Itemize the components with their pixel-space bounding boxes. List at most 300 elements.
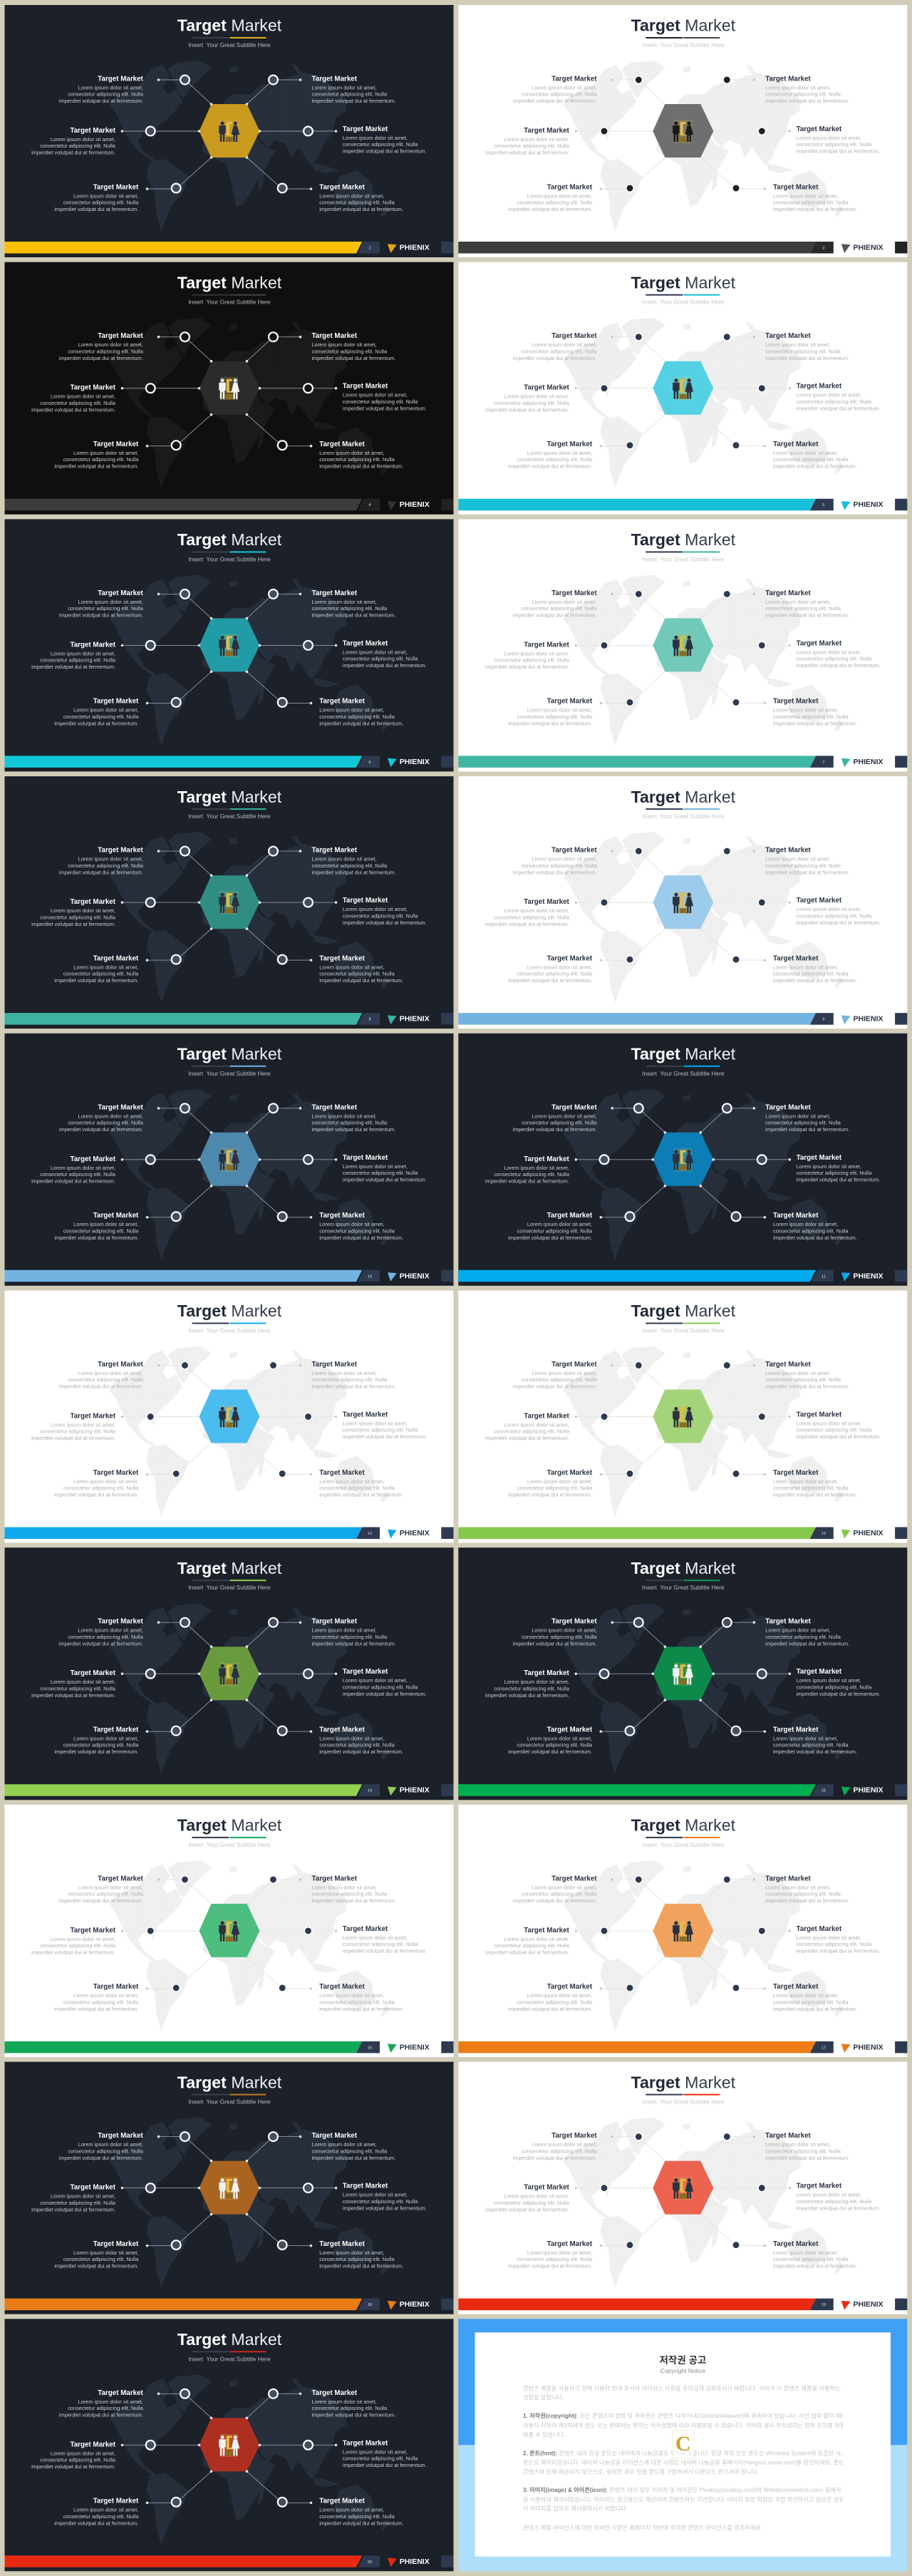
subtitle: Insert Your Great Subtitle Here xyxy=(642,41,725,48)
icon: couple xyxy=(219,2434,239,2456)
callout bottom right: Lorem ipsum dolor sit amet, xyxy=(319,2507,384,2513)
dot nodes xyxy=(601,334,765,449)
callout mid right: Lorem ipsum dolor sit amet, xyxy=(797,649,861,655)
title rule xyxy=(192,1580,266,1581)
callout top left: Target Market xyxy=(98,1875,144,1882)
title: Target Market xyxy=(177,530,282,549)
slide 20: dark, red xyxy=(4,2319,453,2571)
slide 18: dark, orange xyxy=(4,2062,453,2314)
callout top left: Lorem ipsum dolor sit amet, xyxy=(78,599,143,605)
callout top left: consectetur adipiscing elit. Nulla xyxy=(522,862,597,869)
footer bar: PHIENIX xyxy=(400,2300,430,2309)
centre hexagon xyxy=(200,1390,259,1443)
callout bottom left: consectetur adipiscing elit. Nulla xyxy=(63,199,139,205)
ring nodes xyxy=(600,1618,767,1736)
callout mid right: Target Market xyxy=(343,897,388,905)
callout bottom right: Lorem ipsum dolor sit amet, xyxy=(773,1735,838,1741)
callout top right: Target Market xyxy=(312,1103,358,1111)
callout bottom right: consectetur adipiscing elit. Nulla xyxy=(319,1485,395,1491)
world map xyxy=(563,1860,844,2031)
centre hexagon xyxy=(653,361,713,415)
world map xyxy=(563,1603,844,1774)
callout bottom left: imperdiet volutpat dui at fermentum. xyxy=(508,206,592,212)
footer bar: 12 xyxy=(368,1532,372,1536)
callout mid left: consectetur adipiscing elit. Nulla xyxy=(494,1428,570,1435)
callout bottom left: Target Market xyxy=(93,954,139,962)
callout mid right: consectetur adipiscing elit. Nulla xyxy=(797,398,872,405)
callout mid left: Lorem ipsum dolor sit amet, xyxy=(51,1936,115,1942)
callout bottom left: consectetur adipiscing elit. Nulla xyxy=(63,1485,139,1491)
callout top right: Lorem ipsum dolor sit amet, xyxy=(765,1884,830,1890)
callout bottom left: Lorem ipsum dolor sit amet, xyxy=(527,2250,592,2256)
slide 3: white, grey xyxy=(458,5,907,257)
callout mid right: imperdiet volutpat dui at fermentum. xyxy=(343,662,427,669)
connector lines xyxy=(575,850,791,962)
footer bar: 19 xyxy=(822,2303,826,2307)
callout bottom left: Target Market xyxy=(547,441,593,448)
callout top left: imperdiet volutpat dui at fermentum. xyxy=(59,1384,143,1390)
title rule xyxy=(646,2094,720,2096)
icon: couple xyxy=(673,1149,693,1171)
callout mid right: consectetur adipiscing elit. Nulla xyxy=(343,2456,418,2462)
callout bottom left: imperdiet volutpat dui at fermentum. xyxy=(54,2263,138,2270)
callout top right: imperdiet volutpat dui at fermentum. xyxy=(312,2412,395,2418)
centre hexagon xyxy=(653,104,713,158)
callout top left: Target Market xyxy=(98,1361,144,1369)
callout mid left: Target Market xyxy=(70,2184,116,2192)
callout bottom left: consectetur adipiscing elit. Nulla xyxy=(63,456,139,463)
callout mid right: Target Market xyxy=(797,1154,842,1162)
callout mid left: imperdiet volutpat dui at fermentum. xyxy=(31,1949,115,1956)
callout mid left: consectetur adipiscing elit. Nulla xyxy=(40,143,116,149)
callout bottom right: imperdiet volutpat dui at fermentum. xyxy=(319,720,403,726)
callout bottom left: Lorem ipsum dolor sit amet, xyxy=(73,2507,138,2513)
title rule xyxy=(192,37,266,38)
callout top right: Target Market xyxy=(312,847,358,855)
callout top right: Target Market xyxy=(765,1103,812,1111)
world map xyxy=(563,1089,844,1260)
callout mid right: imperdiet volutpat dui at fermentum. xyxy=(797,1433,881,1440)
centre hexagon xyxy=(653,1647,713,1700)
callout top left: Lorem ipsum dolor sit amet, xyxy=(532,2141,597,2148)
callout top right: imperdiet volutpat dui at fermentum. xyxy=(312,355,395,361)
callout top right: consectetur adipiscing elit. Nulla xyxy=(765,348,841,354)
callout mid left: Target Market xyxy=(524,2184,570,2192)
callout top left: consectetur adipiscing elit. Nulla xyxy=(522,1634,597,1640)
callout bottom left: Lorem ipsum dolor sit amet, xyxy=(73,450,138,456)
callout mid right: consectetur adipiscing elit. Nulla xyxy=(797,141,872,148)
copyright heading: 저작권 공고 xyxy=(659,2355,706,2366)
callout top left: consectetur adipiscing elit. Nulla xyxy=(522,1376,597,1383)
callout mid left: Lorem ipsum dolor sit amet, xyxy=(51,1165,115,1171)
callout top right: consectetur adipiscing elit. Nulla xyxy=(765,91,841,98)
world map xyxy=(563,575,844,746)
footer bar xyxy=(458,1784,907,1796)
callout top left: Target Market xyxy=(551,1103,597,1111)
callout top left: Lorem ipsum dolor sit amet, xyxy=(532,856,597,862)
icon: couple xyxy=(673,1406,693,1428)
footer bar xyxy=(458,1270,907,1282)
callout top left: imperdiet volutpat dui at fermentum. xyxy=(59,98,143,104)
callout bottom right: Target Market xyxy=(319,1726,365,1733)
callout mid right: Lorem ipsum dolor sit amet, xyxy=(343,649,408,655)
centre hexagon xyxy=(200,2418,259,2471)
title: Target Market xyxy=(631,530,736,549)
callout top right: consectetur adipiscing elit. Nulla xyxy=(312,1120,388,1126)
subtitle: Insert Your Great Subtitle Here xyxy=(188,2098,271,2106)
callout top right: imperdiet volutpat dui at fermentum. xyxy=(765,355,849,361)
slide 7: white, mint xyxy=(458,519,907,771)
callout mid right: Lorem ipsum dolor sit amet, xyxy=(797,2192,861,2198)
callout top right: imperdiet volutpat dui at fermentum. xyxy=(312,869,395,875)
callout top left: consectetur adipiscing elit. Nulla xyxy=(68,1634,144,1640)
callout top right: Lorem ipsum dolor sit amet, xyxy=(312,2141,377,2148)
footer bar: PHIENIX xyxy=(400,1529,430,1537)
dot nodes xyxy=(601,847,765,963)
callout bottom right: imperdiet volutpat dui at fermentum. xyxy=(773,463,857,470)
title: Target Market xyxy=(177,1816,282,1835)
callout bottom left: consectetur adipiscing elit. Nulla xyxy=(63,1999,139,2005)
slide 15: dark, green xyxy=(458,1547,907,1800)
callout top right: Lorem ipsum dolor sit amet, xyxy=(312,1370,377,1376)
callout mid left: imperdiet volutpat dui at fermentum. xyxy=(31,664,115,670)
title rule xyxy=(646,1323,720,1324)
callout top right: Lorem ipsum dolor sit amet, xyxy=(312,1884,377,1890)
footer bar xyxy=(4,2299,453,2310)
centre hexagon xyxy=(200,618,259,671)
callout bottom left: Target Market xyxy=(93,1469,139,1477)
slide 2: dark, yellow xyxy=(4,5,453,257)
copyright body text: 따를 수 있습니다. xyxy=(523,2431,566,2438)
connector lines xyxy=(575,336,791,447)
title rule xyxy=(192,551,266,552)
connector lines xyxy=(121,1621,337,1733)
callout mid right: Target Market xyxy=(797,897,842,905)
callout top left: imperdiet volutpat dui at fermentum. xyxy=(513,1897,597,1904)
callout bottom right: consectetur adipiscing elit. Nulla xyxy=(319,2256,395,2262)
callout top right: Lorem ipsum dolor sit amet, xyxy=(312,856,377,862)
callout mid left: consectetur adipiscing elit. Nulla xyxy=(40,914,116,920)
hexagon vertex dots xyxy=(198,2160,261,2215)
callout mid left: consectetur adipiscing elit. Nulla xyxy=(40,1685,116,1691)
callout bottom left: Lorem ipsum dolor sit amet, xyxy=(73,192,138,199)
callout top right: consectetur adipiscing elit. Nulla xyxy=(312,348,388,354)
centre hexagon xyxy=(200,1647,259,1700)
hexagon vertex dots xyxy=(651,1131,715,1187)
copyright body text: 2. 폰트(font): 콘텐츠 내의 한글 폰트는 네이버의 나눔글꼴로 제작되었습니다. 한글 외의 모든 폰트는 Windows System에 포함된 시스템 xyxy=(523,2449,851,2456)
callout bottom left: imperdiet volutpat dui at fermentum. xyxy=(54,206,138,212)
footer bar: PHIENIX xyxy=(400,500,430,509)
title: Target Market xyxy=(177,2330,282,2349)
callout bottom right: imperdiet volutpat dui at fermentum. xyxy=(319,1748,403,1755)
title rule xyxy=(192,1066,266,1067)
callout top left: imperdiet volutpat dui at fermentum. xyxy=(59,1897,143,1904)
subtitle: Insert Your Great Subtitle Here xyxy=(188,1841,271,1848)
callout top right: Target Market xyxy=(765,2132,812,2140)
callout top right: Target Market xyxy=(312,589,358,597)
callout mid right: consectetur adipiscing elit. Nulla xyxy=(797,1170,872,1176)
icon: couple xyxy=(219,892,239,914)
callout bottom right: Target Market xyxy=(319,954,365,962)
footer bar xyxy=(4,1013,453,1025)
footer bar xyxy=(458,1013,907,1025)
title rule xyxy=(646,1066,720,1067)
callout bottom left: Lorem ipsum dolor sit amet, xyxy=(73,1735,138,1741)
subtitle: Insert Your Great Subtitle Here xyxy=(188,41,271,48)
world map xyxy=(110,1860,390,2031)
callout bottom left: consectetur adipiscing elit. Nulla xyxy=(517,199,593,205)
callout bottom left: imperdiet volutpat dui at fermentum. xyxy=(508,1491,592,1498)
callout bottom left: Lorem ipsum dolor sit amet, xyxy=(527,450,592,456)
callout bottom right: imperdiet volutpat dui at fermentum. xyxy=(773,720,857,726)
callout mid left: Lorem ipsum dolor sit amet, xyxy=(51,393,115,400)
copyright body text: 것임을 알립니다. xyxy=(523,2394,564,2401)
callout top left: imperdiet volutpat dui at fermentum. xyxy=(513,1384,597,1390)
callout bottom right: consectetur adipiscing elit. Nulla xyxy=(773,1999,849,2005)
centre hexagon xyxy=(653,2161,713,2215)
callout top right: consectetur adipiscing elit. Nulla xyxy=(312,91,388,98)
callout mid right: Lorem ipsum dolor sit amet, xyxy=(797,1934,861,1941)
callout top left: Lorem ipsum dolor sit amet, xyxy=(532,84,597,91)
callout bottom right: imperdiet volutpat dui at fermentum. xyxy=(319,206,403,212)
connector lines xyxy=(575,78,791,190)
callout bottom right: Target Market xyxy=(319,183,365,191)
callout top right: imperdiet volutpat dui at fermentum. xyxy=(765,869,849,875)
callout top left: Lorem ipsum dolor sit amet, xyxy=(78,1884,143,1890)
callout bottom right: Target Market xyxy=(319,2240,365,2248)
callout bottom right: Target Market xyxy=(319,1212,365,1220)
footer bar: 14 xyxy=(368,1789,372,1793)
title: Target Market xyxy=(177,1045,282,1063)
callout bottom left: Target Market xyxy=(547,1469,593,1477)
callout top left: imperdiet volutpat dui at fermentum. xyxy=(513,355,597,361)
slide 4: black, grey xyxy=(4,262,453,515)
callout top right: imperdiet volutpat dui at fermentum. xyxy=(312,1384,395,1390)
callout mid right: Target Market xyxy=(343,1154,388,1162)
icon: couple xyxy=(673,120,693,143)
icon: couple xyxy=(673,634,693,656)
callout bottom left: Target Market xyxy=(93,2240,139,2248)
hexagon vertex dots xyxy=(198,2416,261,2473)
callout bottom right: Lorem ipsum dolor sit amet, xyxy=(773,1992,838,1999)
slide 13: white, lime xyxy=(458,1290,907,1542)
callout mid right: Target Market xyxy=(343,125,388,133)
copyright subheading: Copyright Notice xyxy=(660,2367,705,2374)
icon: couple xyxy=(219,1663,239,1685)
callout bottom left: consectetur adipiscing elit. Nulla xyxy=(63,2513,139,2520)
dot nodes xyxy=(601,590,765,706)
callout bottom left: Lorem ipsum dolor sit amet, xyxy=(527,1478,592,1485)
callout mid right: imperdiet volutpat dui at fermentum. xyxy=(797,2205,881,2211)
connector lines xyxy=(575,2135,791,2247)
callout mid left: imperdiet volutpat dui at fermentum. xyxy=(31,150,115,156)
connector lines xyxy=(121,1878,337,1990)
watermark C: C xyxy=(675,2432,691,2456)
connector lines xyxy=(121,2392,337,2504)
callout bottom left: consectetur adipiscing elit. Nulla xyxy=(63,971,139,977)
callout mid right: Lorem ipsum dolor sit amet, xyxy=(343,392,408,398)
callout bottom right: Lorem ipsum dolor sit amet, xyxy=(319,1221,384,1227)
callout bottom left: Target Market xyxy=(547,183,593,191)
callout top left: imperdiet volutpat dui at fermentum. xyxy=(513,98,597,104)
callout top right: imperdiet volutpat dui at fermentum. xyxy=(312,1126,395,1133)
connector lines xyxy=(121,1364,337,1475)
callout mid right: Target Market xyxy=(343,1925,388,1933)
world map xyxy=(110,61,390,232)
slide 6: dark, cyan xyxy=(4,519,453,771)
callout mid left: Target Market xyxy=(524,1669,570,1677)
slide 12: white, blue xyxy=(4,1290,453,1542)
callout mid right: consectetur adipiscing elit. Nulla xyxy=(343,398,418,405)
callout bottom left: imperdiet volutpat dui at fermentum. xyxy=(54,2006,138,2012)
callout top right: consectetur adipiscing elit. Nulla xyxy=(765,1634,841,1640)
callout top right: imperdiet volutpat dui at fermentum. xyxy=(312,2155,395,2161)
callout bottom left: consectetur adipiscing elit. Nulla xyxy=(517,1742,593,1748)
callout top left: Target Market xyxy=(551,1618,597,1626)
ring nodes xyxy=(146,1618,313,1736)
callout top right: imperdiet volutpat dui at fermentum. xyxy=(765,1126,849,1133)
callout top left: Target Market xyxy=(551,1361,597,1369)
callout mid left: Lorem ipsum dolor sit amet, xyxy=(51,2450,115,2456)
title rule xyxy=(192,808,266,810)
callout top right: imperdiet volutpat dui at fermentum. xyxy=(312,98,395,104)
callout mid left: consectetur adipiscing elit. Nulla xyxy=(40,1171,116,1178)
callout top left: Target Market xyxy=(551,2132,597,2140)
callout bottom left: imperdiet volutpat dui at fermentum. xyxy=(508,1235,592,1241)
connector lines xyxy=(121,593,337,704)
slide 5: white, cyan xyxy=(458,262,907,515)
callout mid right: Target Market xyxy=(797,1668,842,1676)
callout bottom right: consectetur adipiscing elit. Nulla xyxy=(773,1485,849,1491)
callout top left: consectetur adipiscing elit. Nulla xyxy=(522,605,597,612)
hexagon vertex dots xyxy=(651,1645,715,1701)
callout top right: Lorem ipsum dolor sit amet, xyxy=(312,341,377,348)
title: Target Market xyxy=(177,2073,282,2091)
callout top right: imperdiet volutpat dui at fermentum. xyxy=(765,612,849,619)
callout top right: imperdiet volutpat dui at fermentum. xyxy=(765,2155,849,2161)
callout bottom right: imperdiet volutpat dui at fermentum. xyxy=(319,2006,403,2012)
subtitle: Insert Your Great Subtitle Here xyxy=(188,1327,271,1334)
callout mid right: consectetur adipiscing elit. Nulla xyxy=(343,1684,418,1690)
footer bar: 18 xyxy=(368,2303,372,2307)
callout mid right: Target Market xyxy=(343,1411,388,1418)
callout top right: imperdiet volutpat dui at fermentum. xyxy=(765,98,849,104)
callout bottom right: Target Market xyxy=(773,1469,819,1477)
callout bottom right: consectetur adipiscing elit. Nulla xyxy=(773,713,849,720)
icon: couple xyxy=(673,2178,693,2200)
callout mid left: Lorem ipsum dolor sit amet, xyxy=(504,1679,569,1685)
callout bottom left: consectetur adipiscing elit. Nulla xyxy=(63,2256,139,2262)
callout bottom right: Target Market xyxy=(773,441,819,448)
callout bottom left: imperdiet volutpat dui at fermentum. xyxy=(54,720,138,726)
callout top right: consectetur adipiscing elit. Nulla xyxy=(312,2405,388,2411)
subtitle: Insert Your Great Subtitle Here xyxy=(642,1584,725,1591)
callout bottom right: Lorem ipsum dolor sit amet, xyxy=(773,2250,838,2256)
callout top left: Lorem ipsum dolor sit amet, xyxy=(532,1627,597,1634)
centre hexagon xyxy=(653,1390,713,1443)
callout bottom left: consectetur adipiscing elit. Nulla xyxy=(517,1485,593,1491)
connector lines xyxy=(121,850,337,962)
footer bar: 9 xyxy=(822,1018,824,1022)
callout mid right: imperdiet volutpat dui at fermentum. xyxy=(343,2462,427,2468)
callout bottom right: consectetur adipiscing elit. Nulla xyxy=(319,1742,395,1748)
callout top right: Target Market xyxy=(312,2389,358,2397)
callout bottom left: Lorem ipsum dolor sit amet, xyxy=(73,1478,138,1485)
callout bottom left: Lorem ipsum dolor sit amet, xyxy=(527,1992,592,1999)
world map xyxy=(563,318,844,489)
centre hexagon xyxy=(653,875,713,929)
callout top left: consectetur adipiscing elit. Nulla xyxy=(522,2148,597,2154)
callout top left: Lorem ipsum dolor sit amet, xyxy=(78,2141,143,2148)
callout top right: imperdiet volutpat dui at fermentum. xyxy=(765,1640,849,1647)
dot nodes xyxy=(147,1876,312,1992)
callout mid right: Lorem ipsum dolor sit amet, xyxy=(343,1934,408,1941)
callout bottom left: imperdiet volutpat dui at fermentum. xyxy=(54,2520,138,2526)
callout mid right: consectetur adipiscing elit. Nulla xyxy=(797,1684,872,1690)
footer bar: PHIENIX xyxy=(854,1529,884,1537)
callout mid left: Lorem ipsum dolor sit amet, xyxy=(504,1421,569,1428)
slide 17: white, orange xyxy=(458,1805,907,2057)
ring nodes xyxy=(146,2389,313,2507)
callout bottom right: imperdiet volutpat dui at fermentum. xyxy=(773,2263,857,2270)
centre hexagon xyxy=(200,1904,259,1957)
callout bottom left: consectetur adipiscing elit. Nulla xyxy=(517,1227,593,1234)
ring nodes xyxy=(146,847,313,964)
callout bottom left: imperdiet volutpat dui at fermentum. xyxy=(508,720,592,726)
callout bottom left: imperdiet volutpat dui at fermentum. xyxy=(508,2263,592,2270)
callout top left: consectetur adipiscing elit. Nulla xyxy=(68,91,144,98)
callout bottom left: Target Market xyxy=(547,2240,593,2248)
slide 9: white, sky xyxy=(458,776,907,1029)
callout bottom left: consectetur adipiscing elit. Nulla xyxy=(517,456,593,463)
callout top left: imperdiet volutpat dui at fermentum. xyxy=(513,612,597,619)
footer bar: 8 xyxy=(368,1018,371,1022)
callout top left: consectetur adipiscing elit. Nulla xyxy=(522,1891,597,1897)
subtitle: Insert Your Great Subtitle Here xyxy=(188,299,271,306)
centre hexagon xyxy=(200,104,259,158)
callout top left: consectetur adipiscing elit. Nulla xyxy=(68,2148,144,2154)
footer bar: PHIENIX xyxy=(400,244,430,252)
callout mid left: Target Market xyxy=(70,1413,116,1420)
callout top left: Target Market xyxy=(551,589,597,597)
callout bottom left: Lorem ipsum dolor sit amet, xyxy=(73,1221,138,1227)
callout bottom left: Target Market xyxy=(547,1983,593,1991)
callout mid right: consectetur adipiscing elit. Nulla xyxy=(343,1941,418,1947)
callout bottom left: Lorem ipsum dolor sit amet, xyxy=(73,707,138,713)
copyright body text: 폰트로 제작되었습니다. 네이버 나눔글꼴 라이선스에 대한 사항은 네이버 나눔글꼴 홈페이지(hangeul.naver.com)를 참조하세요. 폰트는 콘텐츠와 함께 제공되지 xyxy=(523,2459,908,2466)
title rule xyxy=(192,1323,266,1324)
hexagon vertex dots xyxy=(198,360,261,416)
callout mid right: imperdiet volutpat dui at fermentum. xyxy=(343,2205,427,2211)
connector lines xyxy=(121,2135,337,2247)
icon: couple xyxy=(673,892,693,914)
callout bottom left: consectetur adipiscing elit. Nulla xyxy=(63,713,139,720)
callout mid left: Target Market xyxy=(70,127,116,135)
callout top right: Target Market xyxy=(312,76,358,83)
callout bottom right: imperdiet volutpat dui at fermentum. xyxy=(319,1491,403,1498)
callout top right: Lorem ipsum dolor sit amet, xyxy=(312,1627,377,1634)
footer bar: PHIENIX xyxy=(854,1786,884,1795)
callout mid left: Target Market xyxy=(524,127,570,135)
subtitle: Insert Your Great Subtitle Here xyxy=(188,2355,271,2362)
callout mid right: consectetur adipiscing elit. Nulla xyxy=(797,1427,872,1433)
callout top right: imperdiet volutpat dui at fermentum. xyxy=(312,1897,395,1904)
callout bottom right: Target Market xyxy=(319,1983,365,1991)
callout bottom right: Target Market xyxy=(773,1983,819,1991)
callout top left: consectetur adipiscing elit. Nulla xyxy=(522,348,597,354)
callout bottom left: Target Market xyxy=(547,698,593,706)
callout top right: Lorem ipsum dolor sit amet, xyxy=(765,2141,830,2148)
